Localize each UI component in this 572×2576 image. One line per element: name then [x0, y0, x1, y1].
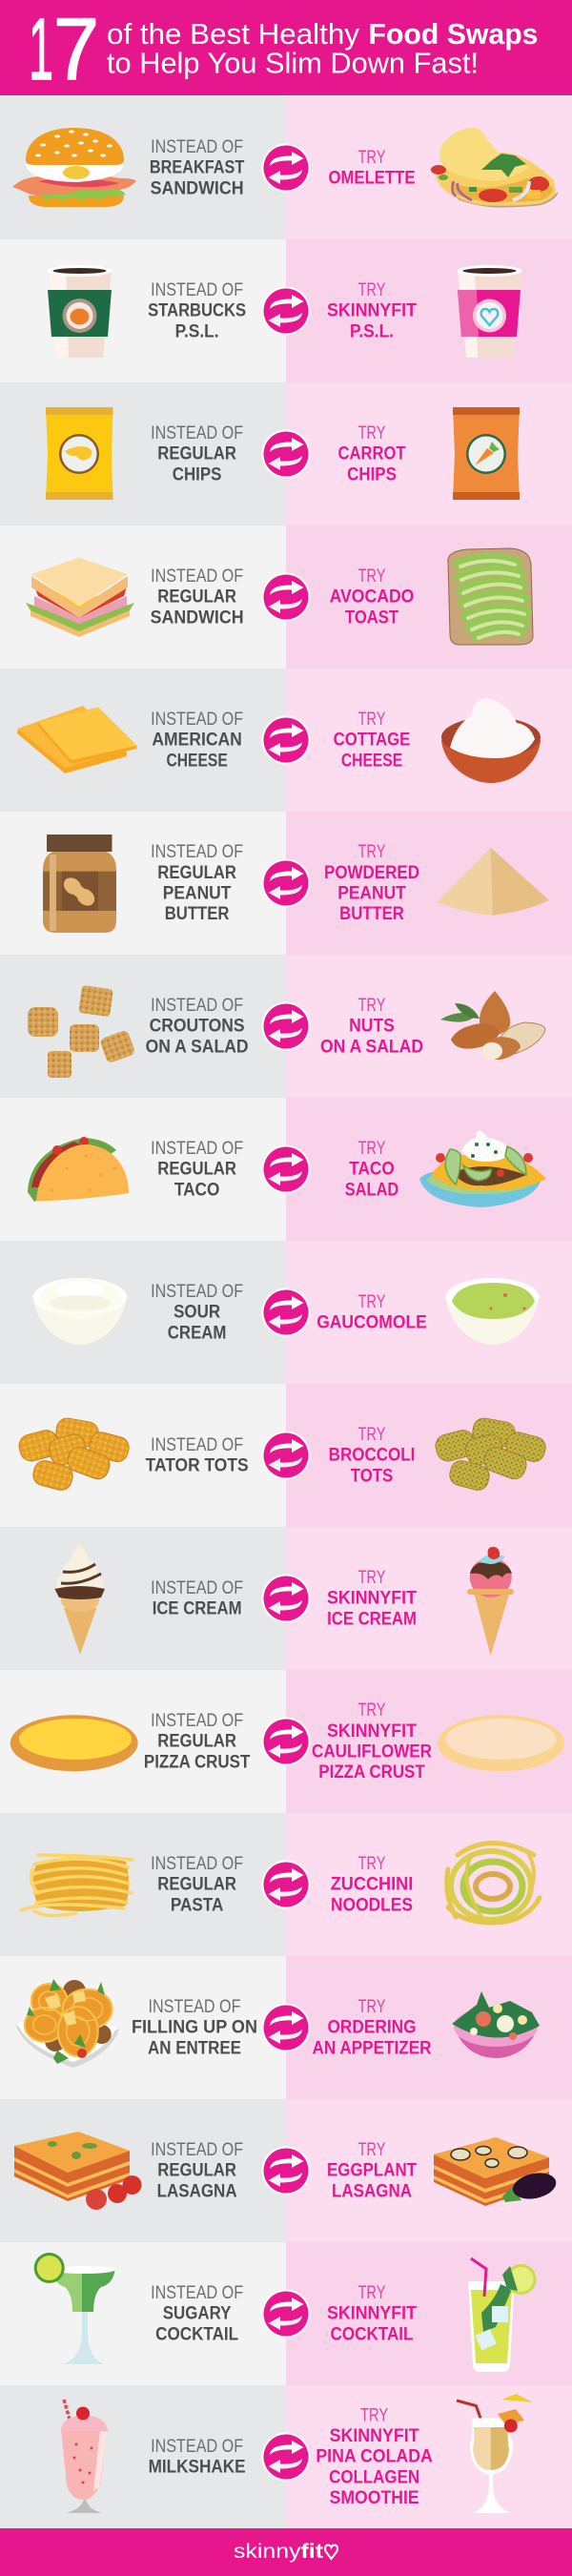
text: instead of sour cream: SOUR — [174, 1303, 220, 1323]
text: try powdered peanut butter: POWDERED — [324, 863, 419, 883]
icon: logo heart — [325, 2545, 337, 2559]
icon: swap arrows — [261, 2432, 311, 2482]
icon: swap arrows — [261, 1431, 311, 1480]
text: instead of ice cream — [151, 1578, 243, 1619]
text: instead of milkshake: INSTEAD OF — [151, 2437, 243, 2457]
icon: salad bowl — [452, 1991, 540, 2058]
row 11: ice cream vs skinnyfit ice cream — [0, 1527, 572, 1670]
text: try omelette: OMELETTE — [328, 168, 416, 189]
text: try skinnyfit cauliflower pizza crust — [312, 1700, 432, 1783]
icon: regular taco — [28, 1137, 129, 1202]
icon: swap arrows — [261, 2003, 311, 2052]
text: instead of regular pizza crust: REGULAR — [157, 1732, 236, 1752]
text: try skinnyfit cauliflower pizza crust: CAULIFLOWER — [312, 1741, 432, 1762]
big number 17: 7 — [53, 1, 99, 98]
text: instead of milkshake — [149, 2437, 246, 2478]
text: try broccoli tots: TRY — [358, 1425, 386, 1445]
text: instead of regular lasagna: LASAGNA — [157, 2181, 237, 2201]
text: instead of croutons on a salad: ON A SALAD — [146, 1037, 249, 1057]
text: instead of tator tots: TATOR TOTS — [146, 1455, 249, 1476]
row 13: pasta vs zucchini noodles — [0, 1813, 572, 1956]
icon: omelette — [431, 128, 559, 208]
text: try skinnyfit cocktail — [327, 2283, 417, 2344]
text: try eggplant lasagna — [327, 2140, 417, 2201]
row 14: entree vs appetizer — [0, 1956, 572, 2099]
text: instead of sour cream — [151, 1282, 243, 1343]
icon: regular sandwich — [26, 557, 134, 637]
big number 17 — [29, 1, 99, 98]
text: try carrot chips — [337, 423, 406, 484]
text: instead of american cheese — [151, 710, 243, 771]
text: instead of regular pizza crust — [144, 1711, 251, 1772]
header banner — [0, 0, 572, 98]
text: try zucchini noodles: ZUCCHINI — [331, 1875, 413, 1895]
text: instead of regular lasagna: REGULAR — [157, 2161, 236, 2181]
text: instead of sugary cocktail: COCKTAIL — [155, 2324, 238, 2344]
icon: cottage cheese bowl — [441, 698, 541, 783]
icon: carrot chips bag — [453, 407, 520, 500]
text: instead of regular taco: INSTEAD OF — [151, 1139, 243, 1159]
text: instead of american cheese: AMERICAN — [152, 731, 242, 751]
icon: skinnyfit ice cream cone — [467, 1547, 514, 1656]
text: try skinnyfit pina colada collagen smoothie: PINA COLADA — [316, 2447, 433, 2467]
logo: skinnyfit: skinny fit — [234, 2541, 323, 2563]
text: instead of regular pizza crust: INSTEAD OF — [151, 1711, 243, 1731]
icon: croutons — [28, 985, 135, 1078]
icon: swap arrows — [261, 2289, 311, 2339]
title — [107, 17, 538, 80]
icon: swap arrows — [261, 1144, 311, 1194]
text: instead of ice cream: ICE CREAM — [153, 1598, 242, 1619]
text: try ordering an appetizer — [313, 1997, 432, 2058]
text: instead of filling up on an entree: AN ENTREE — [148, 2038, 241, 2058]
icon: taco salad — [419, 1130, 546, 1207]
icon: guacamole bowl — [446, 1278, 540, 1345]
icon: margarita — [34, 2253, 115, 2364]
text: try skinnyfit ice cream: ICE CREAM — [327, 1609, 417, 1629]
row 17: milkshake vs pina colada smoothie — [0, 2385, 572, 2528]
text: try skinnyfit ice cream: TRY — [358, 1568, 386, 1588]
icon: broccoli tots — [433, 1416, 548, 1493]
title: of the Best Healthy — [107, 17, 359, 51]
text: try omelette: TRY — [358, 148, 386, 168]
text: try skinnyfit pina colada collagen smoothie — [316, 2405, 433, 2508]
text: try taco salad — [345, 1139, 398, 1200]
text: try skinnyfit psl: TRY — [358, 280, 386, 300]
text: try broccoli tots — [329, 1425, 415, 1486]
text: instead of croutons on a salad: INSTEAD OF — [151, 996, 243, 1016]
icon: swap arrows — [261, 715, 311, 765]
text: try zucchini noodles — [331, 1854, 413, 1915]
text: try gaucomole: GAUCOMOLE — [317, 1312, 427, 1333]
text: instead of regular lasagna: INSTEAD OF — [151, 2140, 243, 2160]
text: instead of regular pasta: PASTA — [171, 1895, 224, 1915]
icon: peanut butter jar — [43, 835, 116, 933]
text: instead of sugary cocktail: SUGARY — [163, 2304, 232, 2324]
icon: swap arrows — [261, 143, 311, 193]
icon: tator tots — [16, 1416, 132, 1493]
text: instead of sour cream: INSTEAD OF — [151, 1282, 243, 1302]
icon: swap arrows — [261, 429, 311, 479]
text: try skinnyfit pina colada collagen smoothie: TRY — [360, 2405, 388, 2425]
text: instead of filling up on an entree: FILLING UP ON — [132, 2018, 257, 2038]
text: try eggplant lasagna: TRY — [358, 2140, 386, 2160]
row 1: breakfast sandwich vs omelette — [0, 96, 572, 239]
text: try cottage cheese: CHEESE — [341, 751, 402, 771]
text: try ordering an appetizer: ORDERING — [328, 2018, 416, 2038]
text: instead of filling up on an entree: INSTEAD OF — [149, 1997, 240, 2017]
text: instead of american cheese: INSTEAD OF — [151, 710, 243, 730]
text: instead of regular taco — [151, 1139, 243, 1200]
text: instead of breakfast sandwich: SANDWICH — [151, 178, 244, 198]
text: try skinnyfit ice cream: SKINNYFIT — [327, 1589, 417, 1609]
icon: powdered peanut butter pile — [437, 848, 549, 916]
text: instead of regular pasta: REGULAR — [157, 1875, 236, 1895]
icon: avocado toast — [448, 548, 533, 645]
big number 17: 1 — [29, 1, 53, 98]
row 16: sugary cocktail vs skinnyfit cocktail — [0, 2242, 572, 2385]
text: try skinnyfit ice cream — [327, 1568, 417, 1629]
title: to Help You Slim Down Fast! — [107, 47, 479, 80]
text: try broccoli tots: BROCCOLI — [329, 1446, 415, 1466]
text: try skinnyfit pina colada collagen smoothie: SKINNYFIT — [330, 2426, 419, 2446]
row 10: tator tots vs broccoli tots — [0, 1384, 572, 1527]
text: instead of regular taco: TACO — [174, 1180, 219, 1200]
icon: pina colada — [457, 2394, 533, 2513]
icon: regular lasagna — [14, 2132, 141, 2210]
text: instead of breakfast sandwich: INSTEAD OF — [151, 137, 243, 157]
text: try cottage cheese — [334, 710, 410, 771]
text: instead of regular pasta — [151, 1854, 243, 1915]
icon: swap arrows — [261, 1717, 311, 1766]
text: instead of starbucks psl: P.S.L. — [175, 321, 219, 341]
text: instead of regular peanut butter: PEANUT — [163, 883, 232, 904]
row 6: peanut butter vs powdered peanut butter — [0, 812, 572, 955]
text: try avocado toast: AVOCADO — [330, 587, 414, 608]
text: instead of ice cream: INSTEAD OF — [151, 1578, 243, 1598]
icon: swap arrows — [261, 1860, 311, 1909]
text: try omelette — [328, 148, 416, 189]
icon: almonds — [440, 991, 545, 1060]
icon: ice cream cone — [54, 1544, 105, 1655]
text: try eggplant lasagna: LASAGNA — [332, 2181, 412, 2201]
icon: spaghetti plate — [16, 1979, 120, 2068]
text: try skinnyfit psl: P.S.L. — [350, 321, 394, 341]
row 12: pizza crust vs cauliflower crust — [0, 1670, 572, 1813]
text: instead of breakfast sandwich — [150, 137, 245, 198]
icon: starbucks cup — [48, 265, 112, 358]
text: try eggplant lasagna: EGGPLANT — [327, 2161, 417, 2181]
text: instead of regular peanut butter: REGULAR — [157, 863, 236, 883]
text: try zucchini noodles: NOODLES — [331, 1895, 413, 1915]
text: try avocado toast: TOAST — [345, 608, 398, 628]
text: try powdered peanut butter: BUTTER — [339, 904, 404, 924]
row 9: sour cream vs guacamole — [0, 1241, 572, 1384]
icon: swap arrows — [261, 572, 311, 622]
icon: sour cream bowl — [32, 1278, 127, 1345]
text: try carrot chips: TRY — [358, 423, 386, 443]
text: try ordering an appetizer: AN APPETIZER — [313, 2038, 432, 2058]
text: instead of sugary cocktail — [151, 2283, 243, 2344]
row 15: lasagna vs eggplant lasagna — [0, 2099, 572, 2242]
icon: eggplant lasagna — [434, 2137, 559, 2206]
text: try carrot chips: CARROT — [337, 444, 406, 464]
text: try gaucomole: TRY — [358, 1292, 386, 1312]
row 8: taco vs taco salad — [0, 1098, 572, 1241]
row 5: american cheese vs cottage cheese — [0, 669, 572, 812]
text: try nuts on a salad: NUTS — [349, 1017, 395, 1037]
text: instead of croutons on a salad — [146, 996, 249, 1057]
text: try skinnyfit psl — [327, 280, 417, 341]
icon: swap arrows — [261, 1574, 311, 1623]
text: try powdered peanut butter — [324, 842, 419, 924]
text: instead of breakfast sandwich: BREAKFAST — [150, 158, 245, 178]
text: instead of starbucks psl: INSTEAD OF — [151, 280, 243, 300]
text: instead of tator tots: INSTEAD OF — [151, 1435, 243, 1455]
text: instead of filling up on an entree — [132, 1997, 257, 2058]
text: instead of starbucks psl: STARBUCKS — [148, 301, 246, 321]
text: try powdered peanut butter: PEANUT — [337, 883, 406, 904]
text: try skinnyfit cocktail: TRY — [358, 2283, 386, 2303]
text: instead of croutons on a salad: CROUTONS — [150, 1017, 245, 1037]
text: try taco salad: TACO — [349, 1160, 395, 1180]
text: try taco salad: SALAD — [345, 1180, 398, 1200]
text: try skinnyfit pina colada collagen smoothie: SMOOTHIE — [330, 2488, 419, 2508]
text: try carrot chips: CHIPS — [347, 464, 397, 484]
title: Food Swaps — [368, 17, 538, 51]
text: instead of regular pasta: INSTEAD OF — [151, 1854, 243, 1874]
row 2: starbucks psl vs skinnyfit psl — [0, 239, 572, 382]
text: try cottage cheese: COTTAGE — [334, 731, 410, 751]
icon: swap arrows — [261, 286, 311, 336]
text: try skinnyfit cauliflower pizza crust: TRY — [358, 1700, 386, 1721]
text: try nuts on a salad: TRY — [358, 996, 386, 1016]
text: try skinnyfit cocktail: SKINNYFIT — [327, 2304, 417, 2324]
text: instead of milkshake: MILKSHAKE — [149, 2457, 246, 2478]
footer banner with logo — [0, 2528, 572, 2576]
text: try broccoli tots: TOTS — [351, 1466, 393, 1486]
icon: american cheese slices — [17, 706, 137, 773]
text: try zucchini noodles: TRY — [358, 1854, 386, 1874]
row 7: croutons vs nuts — [0, 955, 572, 1098]
text: instead of regular chips: CHIPS — [173, 464, 221, 484]
icon: swap arrows — [261, 858, 311, 908]
row 4: sandwich vs avocado toast — [0, 526, 572, 669]
text: instead of regular chips — [151, 423, 243, 484]
text: try skinnyfit pina colada collagen smoothie: COLLAGEN — [329, 2467, 419, 2487]
icon: swap arrows — [261, 2146, 311, 2195]
text: instead of regular sandwich — [151, 567, 244, 628]
text: instead of sugary cocktail: INSTEAD OF — [151, 2283, 243, 2303]
text: try skinnyfit cauliflower pizza crust: PIZZA CRUST — [318, 1762, 425, 1783]
text: instead of regular peanut butter: BUTTER — [165, 904, 230, 924]
text: instead of regular chips: INSTEAD OF — [151, 423, 243, 443]
text: instead of regular lasagna — [151, 2140, 243, 2201]
text: instead of regular sandwich: REGULAR — [157, 587, 236, 608]
icon: regular chips bag — [46, 407, 112, 500]
text: try gaucomole — [317, 1292, 427, 1333]
icon: regular pasta — [21, 1855, 133, 1916]
text: try nuts on a salad — [320, 996, 423, 1057]
icon: breakfast sandwich — [12, 128, 136, 207]
icon: regular pizza crust — [10, 1715, 138, 1771]
text: try skinnyfit cocktail: COCKTAIL — [330, 2324, 414, 2344]
text: try skinnyfit psl: SKINNYFIT — [327, 301, 417, 321]
text: instead of sour cream: CREAM — [168, 1323, 226, 1343]
text: try nuts on a salad: ON A SALAD — [320, 1037, 423, 1057]
text: try skinnyfit cauliflower pizza crust: SKINNYFIT — [327, 1721, 417, 1741]
text: try taco salad: TRY — [358, 1139, 386, 1159]
text: instead of regular taco: REGULAR — [157, 1160, 236, 1180]
text: try avocado toast: TRY — [358, 567, 386, 587]
text: instead of regular pizza crust: PIZZA CRUST — [144, 1752, 251, 1772]
text: instead of regular peanut butter: INSTEAD OF — [151, 842, 243, 862]
icon: cauliflower pizza crust — [438, 1715, 564, 1771]
icon: swap arrows — [261, 1288, 311, 1337]
icon: milkshake — [61, 2400, 108, 2513]
text: instead of tator tots — [146, 1435, 249, 1476]
text: instead of regular sandwich: INSTEAD OF — [151, 567, 243, 587]
text: try avocado toast — [330, 567, 414, 628]
text: instead of regular chips: REGULAR — [157, 444, 236, 464]
text: instead of regular sandwich: SANDWICH — [151, 608, 244, 628]
row 3: chips vs carrot chips — [0, 382, 572, 526]
icon: mojito — [468, 2258, 536, 2372]
text: instead of regular peanut butter — [151, 842, 243, 924]
icon: swap arrows — [261, 1001, 311, 1051]
icon: skinnyfit cup — [458, 265, 522, 358]
icon: zucchini noodles — [447, 1843, 540, 1923]
text: try powdered peanut butter: TRY — [358, 842, 386, 862]
text: try ordering an appetizer: TRY — [358, 1997, 386, 2017]
text: instead of american cheese: CHEESE — [166, 751, 228, 771]
text: try cottage cheese: TRY — [358, 710, 386, 730]
text: instead of starbucks psl — [148, 280, 246, 341]
